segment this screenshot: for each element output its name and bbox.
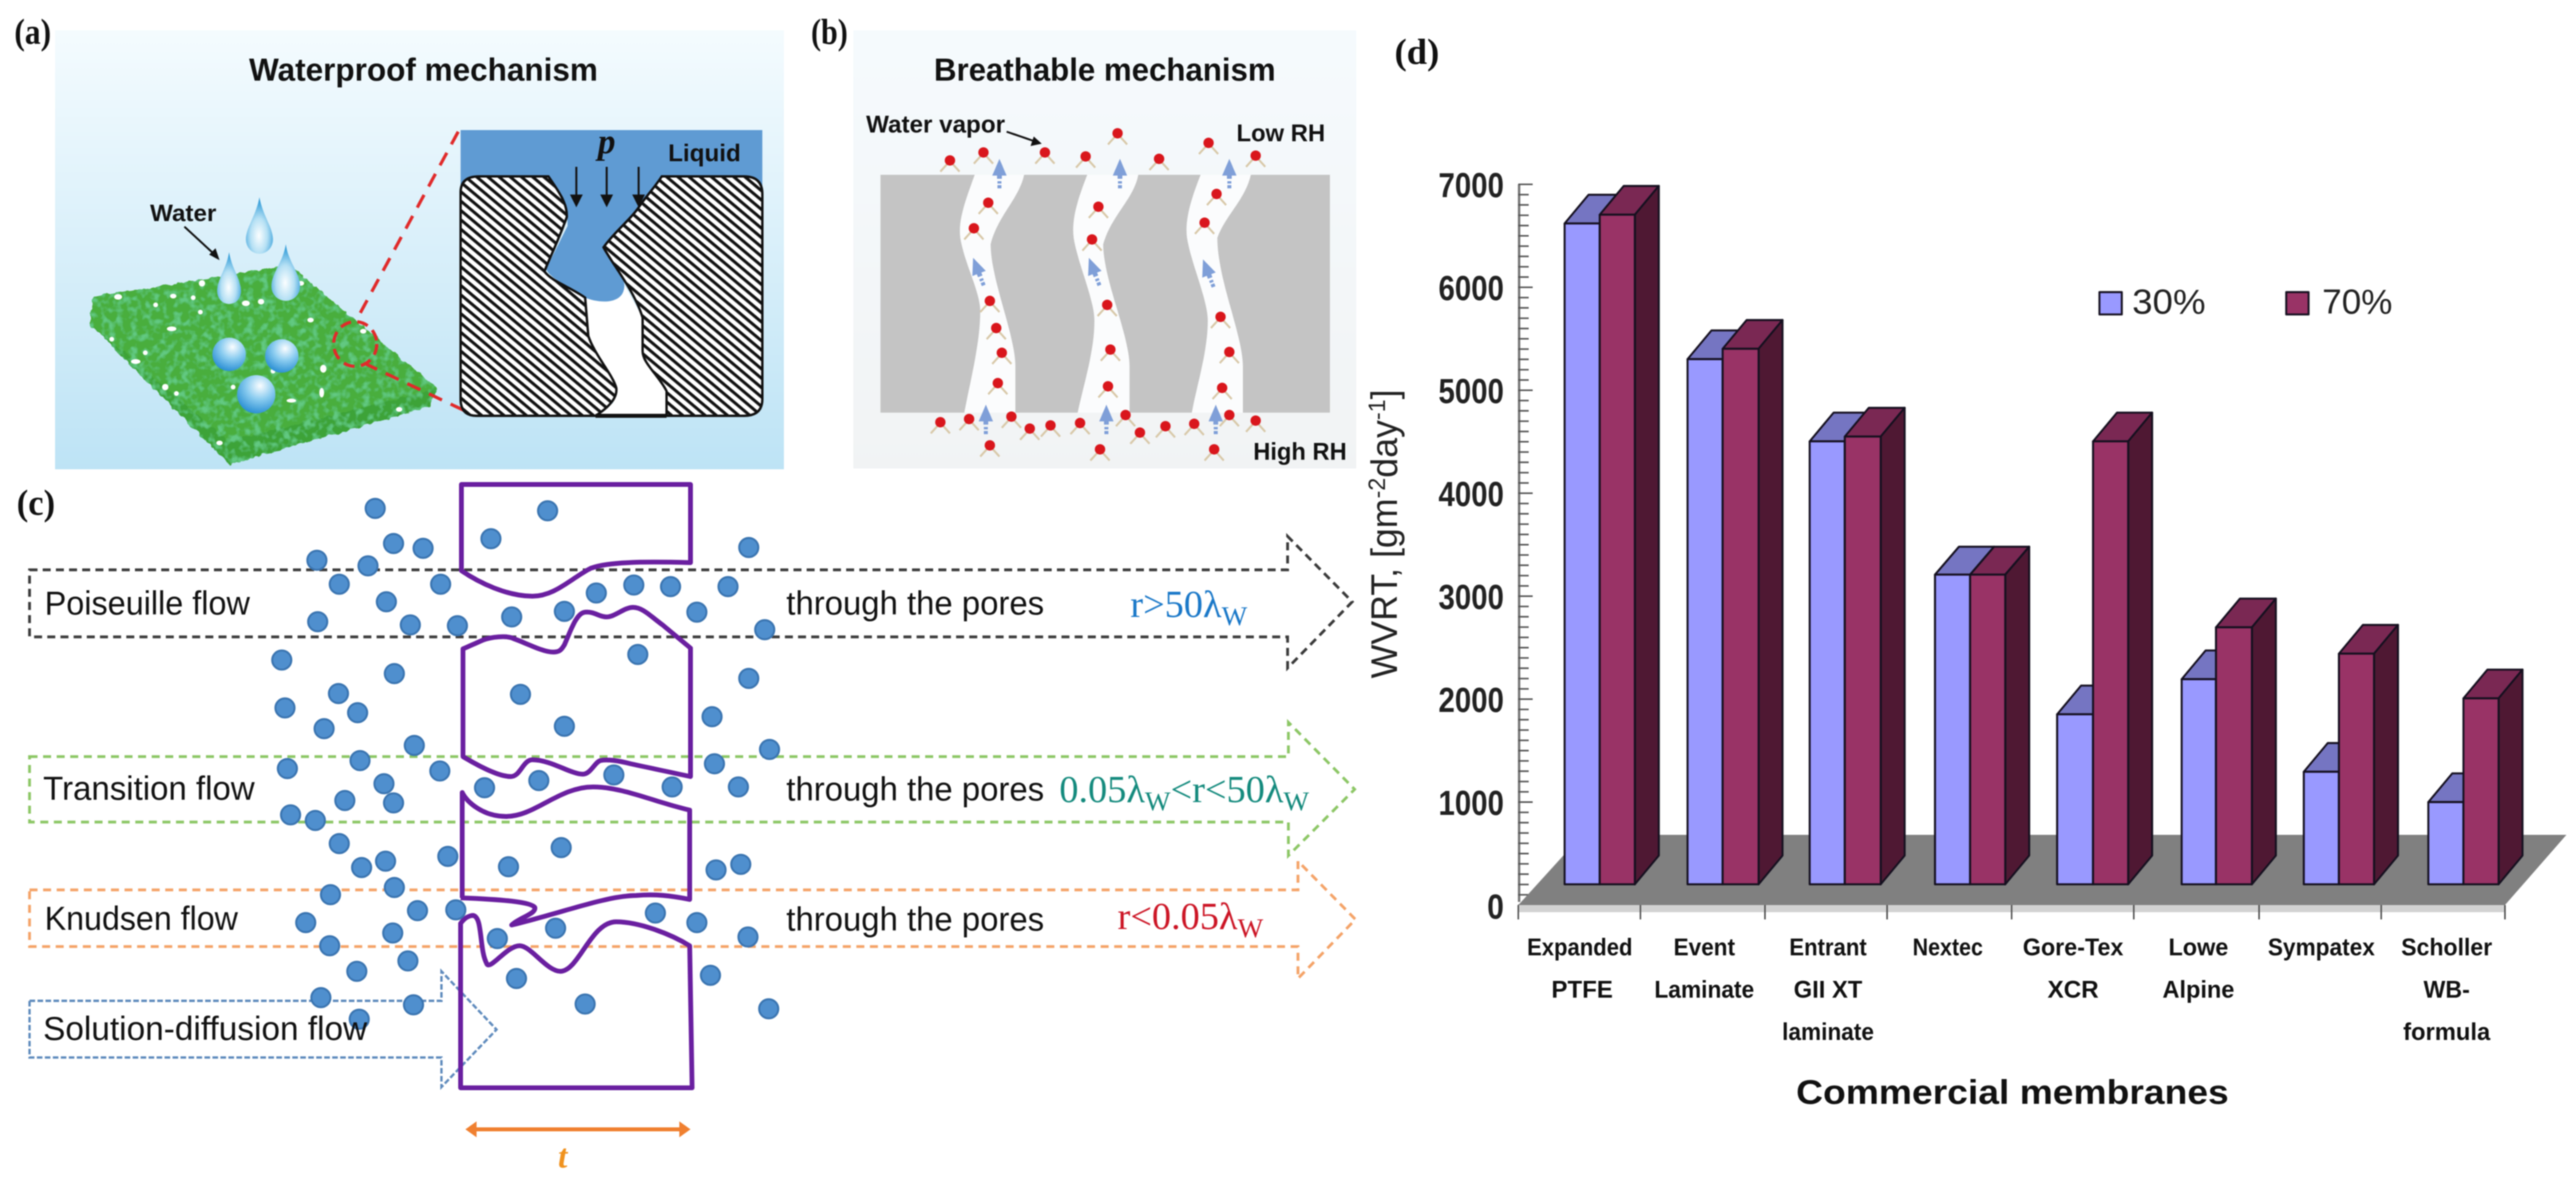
bars: Scholler WB-formula	[2428, 670, 2523, 884]
condition: transition range: W	[1284, 787, 1310, 816]
x axis category labels: Sympatex	[2268, 933, 2376, 961]
pressure arrows	[572, 167, 643, 205]
heading: waterproof mechanism: Waterproof mechanism	[249, 53, 598, 88]
panel label (a): (a)	[14, 11, 51, 52]
x axis category labels: Scholler	[2401, 933, 2492, 961]
through the pores labels: through the pores	[786, 900, 1044, 938]
bars: Event Laminate	[1688, 320, 1783, 884]
flow names: Transition flow	[43, 769, 255, 807]
panel: WVRT bar chart	[1363, 31, 2566, 1112]
panel: waterproof mechanism	[14, 11, 784, 469]
flow names: Knudsen flow	[45, 899, 239, 937]
y axis ticks	[1519, 184, 1525, 906]
membrane outline pieces	[461, 484, 692, 1088]
panel label (c): (c)	[17, 482, 55, 523]
y axis title: ]	[1363, 389, 1405, 399]
x axis category labels: formula	[2403, 1018, 2491, 1046]
y axis tick labels: 4000	[1438, 475, 1504, 514]
legend	[2099, 283, 2392, 322]
vapor flow arrows	[967, 159, 1237, 434]
y axis tick labels: 0	[1487, 887, 1504, 927]
x axis category labels: Lowe	[2168, 933, 2229, 961]
bars: Lowe Alpine	[2182, 599, 2276, 884]
y axis tick labels: 6000	[1438, 269, 1504, 308]
arrow: Knudsen flow	[30, 861, 1355, 978]
through the pores labels: through the pores	[786, 770, 1044, 808]
y axis tick labels: 1000	[1438, 784, 1504, 823]
condition: transition range: W	[1145, 787, 1171, 816]
heading: breathable mechanism: Breathable mechanism	[934, 53, 1276, 88]
grey membrane with pores	[880, 175, 1330, 413]
x axis category labels: Event	[1673, 933, 1735, 961]
y axis title: WVRT, [gm	[1363, 493, 1405, 678]
x axis category labels: Laminate	[1654, 975, 1755, 1003]
chart floor	[1518, 835, 2566, 912]
label: high RH: High RH	[1253, 437, 1347, 465]
zoom indicator: red dashed lines	[334, 132, 465, 411]
condition: transition range: <r<50λ	[1170, 769, 1284, 811]
y axis tick labels: 7000	[1438, 166, 1504, 205]
bars: Nextec	[1935, 547, 2029, 884]
x axis category labels: XCR	[2048, 975, 2099, 1003]
x axis category labels	[1527, 933, 2492, 1046]
y axis tick labels: 5000	[1438, 372, 1504, 411]
condition: r greater than 50 lambda: r>50λ	[1130, 583, 1221, 626]
arrow: transition flow	[30, 722, 1355, 856]
label: water with arrow	[150, 200, 220, 260]
condition: r less than 0.05 lambda: W	[1237, 914, 1264, 943]
panel label (b): (b)	[811, 11, 848, 52]
thickness arrow	[465, 1121, 690, 1137]
y axis title: -1	[1364, 399, 1391, 420]
x axis category labels: Expanded	[1527, 933, 1632, 961]
flow names: Solution-diffusion flow	[43, 1010, 368, 1047]
y axis title: day	[1363, 420, 1405, 478]
y axis tick labels	[1438, 166, 1504, 927]
pressure symbol p: p	[595, 122, 615, 161]
bars: Sympatex	[2304, 625, 2398, 884]
condition: r less than 0.05 lambda: r<0.05λ	[1118, 895, 1237, 938]
label: water vapor with arrow	[866, 110, 1042, 146]
label: water vapor with arrow: Water vapor	[866, 110, 1005, 138]
through the pores labels: through the pores	[786, 584, 1044, 622]
label: liquid: Liquid	[668, 139, 741, 167]
label: low RH: Low RH	[1237, 119, 1325, 147]
gas molecules	[272, 499, 779, 1029]
x axis category labels: Nextec	[1913, 933, 1983, 961]
water droplets	[212, 197, 300, 413]
y axis title: -2	[1364, 478, 1391, 499]
panel: breathable mechanism	[811, 11, 1356, 468]
x axis category labels: laminate	[1782, 1018, 1874, 1046]
legend: 70%	[2322, 283, 2392, 322]
arrow: solution-diffusion flow	[30, 971, 497, 1087]
x axis category labels: Entrant	[1790, 933, 1866, 961]
thickness label t: t	[558, 1139, 568, 1176]
x axis ticks	[1518, 905, 2505, 919]
label: water with arrow: Water	[150, 200, 216, 227]
x axis category labels: WB-	[2424, 975, 2470, 1003]
arrow: Poiseuille flow	[30, 536, 1352, 668]
green membrane sheet	[89, 265, 437, 464]
x axis category labels: GII XT	[1794, 975, 1862, 1003]
y axis tick labels: 2000	[1438, 681, 1504, 720]
inset: pore cross-section	[461, 122, 762, 416]
condition: transition range: 0.05λ	[1059, 769, 1145, 811]
bars: Gore-Tex XCR	[2057, 413, 2152, 884]
x axis category labels: PTFE	[1552, 975, 1612, 1003]
x axis category labels: Gore-Tex	[2023, 933, 2124, 961]
panel label (d): (d)	[1395, 31, 1439, 72]
flow names	[43, 584, 368, 1047]
condition: r greater than 50 lambda: W	[1221, 602, 1248, 631]
through the pores labels	[786, 584, 1044, 938]
panel: flow regimes through pores	[17, 482, 1355, 1176]
water vapor molecules	[931, 128, 1265, 461]
flow names: Poiseuille flow	[45, 584, 251, 622]
bars: Entrant GII XT laminate	[1810, 408, 1905, 884]
bars: Expanded PTFE	[1565, 186, 1659, 884]
legend: 30%	[2132, 283, 2206, 322]
x axis title: Commercial membranes	[1796, 1073, 2229, 1112]
y axis tick labels: 3000	[1438, 578, 1504, 617]
x axis category labels: Alpine	[2162, 975, 2234, 1003]
